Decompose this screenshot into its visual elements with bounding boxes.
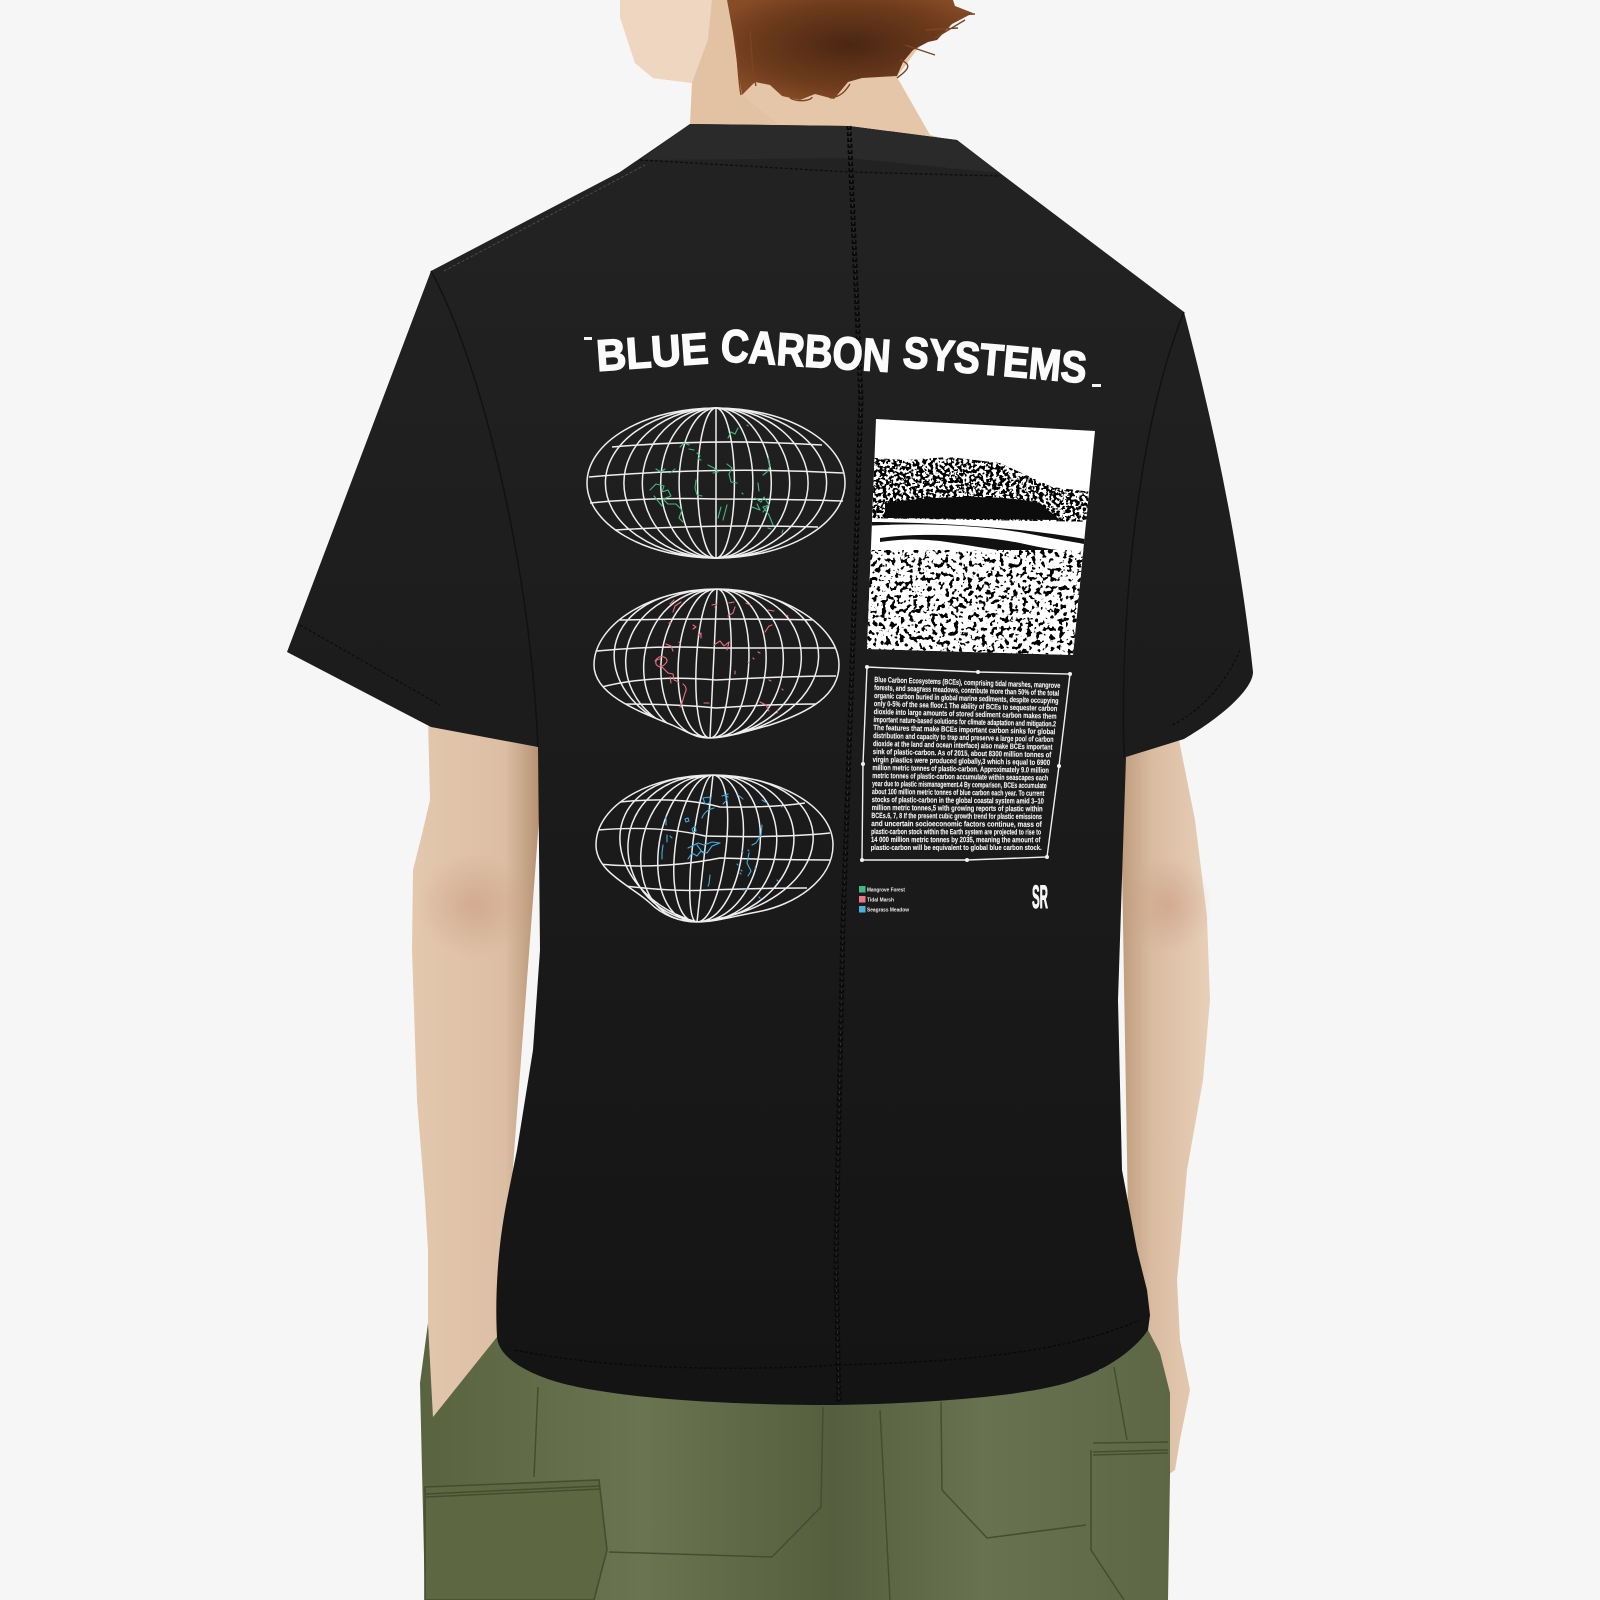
print: title: SYSTEMS: [901, 328, 1089, 393]
print: title: [584, 319, 1101, 393]
text panel: [860, 665, 1072, 862]
text panel: year due to plastic mismanagement.4 By comparison, BCEs accumulate: [872, 779, 1047, 790]
text panel: about 100 million metric tonnes of blue carbon each year. To current: [872, 787, 1045, 798]
collar rib: [640, 124, 1000, 173]
text panel: forests, and seagrass meadows, contribute more than 50% of the total: [874, 683, 1059, 698]
text panel: BCEs.6, 7, 8 If the present cubic growth trend for plastic emissions: [871, 811, 1042, 821]
sky: [860, 415, 1100, 660]
text panel: only 0-5% of the sea floor.1 The ability of BCEs to sequester carbon: [874, 699, 1058, 713]
print: title: CARBON: [719, 319, 892, 382]
shoreline band: [872, 522, 1084, 544]
text panel: organic carbon buried in global marine sediments, despite occupying: [874, 691, 1059, 705]
halftone photograph: [860, 415, 1100, 660]
text panel: sink of plastic-carbon. As of 2015, about 8300 million tonnes of: [873, 747, 1052, 759]
text panel: dioxide into large amounts of stored sediment carbon makes them: [874, 707, 1057, 721]
right arm: [1120, 735, 1212, 1475]
legend: Tidal Marsh: [867, 898, 895, 904]
legend: Seagrass Meadow: [867, 908, 910, 914]
globe: seagrass meadow: [596, 775, 833, 922]
text panel: million metric tonnes,5 with growing reports of plastic within: [872, 803, 1043, 813]
olive cargo trousers: [420, 1323, 1170, 1600]
text panel: important nature-based solutions for climate adaptation and mitigation.2: [873, 715, 1056, 728]
model hair: [727, 0, 975, 101]
seams and stitching: [300, 126, 1240, 1403]
text: SR: [1032, 879, 1048, 915]
model head and neck: [620, 0, 957, 142]
left cargo pocket: [425, 1480, 607, 1600]
left arm: [412, 720, 545, 1417]
text panel: distribution and capacity to trap and preserve a large pool of carbon: [873, 731, 1054, 744]
vegetation foreground: [867, 550, 1084, 655]
text panel: and uncertain socioeconomic factors continue, mass of: [871, 819, 1042, 829]
text panel: Blue Carbon Ecosystems (BCEs), comprising tidal marshes, mangrove: [874, 675, 1060, 690]
text panel: 14 000 million metric tonnes by 2035, meaning the amount of: [871, 835, 1041, 844]
globe: tidal marsh: [594, 589, 839, 738]
text panel: dioxide at the land and ocean interface) also make BCEs important: [873, 739, 1053, 752]
tree line: [872, 457, 1089, 522]
print: title: BLUE: [595, 324, 710, 381]
black t-shirt: [287, 124, 1253, 1405]
globe: mangrove forest: [587, 408, 845, 558]
text panel: The features that make BCEs important carbon sinks for global: [873, 723, 1055, 736]
legend: Mangrove Forest: [867, 888, 905, 894]
text panel: million metric tonnes of plastic-carbon. Approximately 9.0 million: [872, 763, 1049, 775]
legend: [859, 886, 910, 914]
text panel: virgin plastics were produced globally,3 which is equal to 6900: [873, 755, 1050, 767]
text panel: plastic-carbon stock within the Earth system are projected to rise to: [871, 827, 1041, 837]
text panel: stocks of plastic-carbon in the global coastal system amid 3–10: [872, 795, 1044, 806]
text panel: metric tonnes of plastic-carbon accumulate within seascapes each: [872, 771, 1049, 782]
text panel: plastic-carbon will be equivalent to global blue carbon stock.: [871, 843, 1042, 852]
